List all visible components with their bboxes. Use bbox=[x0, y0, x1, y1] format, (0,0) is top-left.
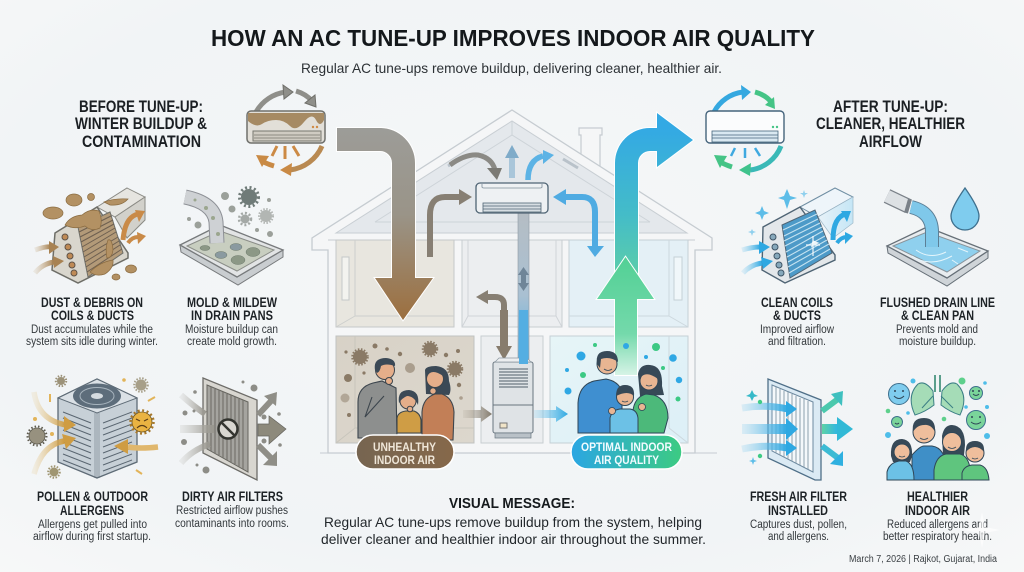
icon: clean AC unit with circulating arrows bbox=[706, 85, 784, 176]
label text: HEALTHIER bbox=[907, 489, 968, 504]
label text: FRESH AIR FILTER bbox=[750, 489, 847, 504]
label text: Captures dust, pollen, bbox=[750, 519, 847, 531]
label text: better respiratory health. bbox=[883, 531, 992, 543]
lower left room bbox=[336, 336, 474, 443]
label text: Allergens get pulled into bbox=[38, 519, 147, 531]
icon: lungs, smileys and family bbox=[885, 375, 990, 480]
panel: clean coils and ducts bbox=[742, 188, 853, 348]
label: unhealthy indoor air: UNHEALTHY bbox=[373, 442, 436, 454]
icon: dirty coil bbox=[35, 188, 146, 283]
date and location: March 7, 2026 | Rajkot, Gujarat, India bbox=[849, 554, 997, 565]
label text: Moisture buildup can bbox=[185, 324, 278, 336]
label text: ALLERGENS bbox=[60, 503, 124, 518]
label text: DUST & DEBRIS ON bbox=[41, 295, 143, 310]
label text: DIRTY AIR FILTERS bbox=[182, 489, 283, 504]
subtitle: Regular AC tune-ups remove buildup, delivering cleaner, healthier air. bbox=[301, 60, 722, 76]
title: HOW AN AC TUNE-UP IMPROVES INDOOR AIR QUALITY bbox=[211, 25, 815, 51]
icon: dirty AC unit with circulating arrows bbox=[247, 85, 325, 176]
label text bbox=[880, 295, 995, 348]
upper centre room bbox=[462, 240, 562, 327]
panel: flushed drain line and clean pan bbox=[880, 188, 995, 348]
house outline bbox=[312, 110, 712, 453]
panel: healthier indoor air bbox=[883, 375, 992, 543]
panel: dust and debris on coils and ducts bbox=[26, 188, 158, 348]
furnace unit with arrows bbox=[463, 310, 568, 438]
label: optimal indoor air quality: AIR QUALITY bbox=[594, 455, 659, 467]
woman coughing bbox=[425, 366, 450, 395]
label text: INDOOR AIR bbox=[905, 503, 970, 518]
arrow: main clean air up bbox=[615, 113, 693, 285]
label text bbox=[760, 295, 835, 348]
label text: & DUCTS bbox=[773, 308, 821, 323]
label: optimal indoor air quality bbox=[571, 435, 682, 469]
central AC and duct bbox=[476, 183, 548, 363]
father bbox=[912, 446, 946, 480]
panel: before heading bbox=[75, 98, 207, 151]
label text: contaminants into rooms. bbox=[175, 518, 289, 530]
panel: dirty air filters bbox=[175, 378, 289, 530]
decorative sparkle bbox=[964, 512, 1000, 548]
visual message: Regular AC tune-ups remove buildup from the system, helping bbox=[324, 514, 702, 530]
mother bbox=[638, 365, 664, 396]
label: unhealthy indoor air: INDOOR AIR bbox=[374, 455, 436, 467]
healthy family and clean particles bbox=[564, 343, 682, 433]
house diagram bbox=[312, 110, 717, 453]
label text: Improved airflow bbox=[760, 324, 835, 336]
child bbox=[610, 409, 638, 433]
chimney bbox=[579, 128, 602, 180]
label text bbox=[750, 489, 847, 543]
panel: before heading: CONTAMINATION bbox=[82, 133, 201, 151]
panel: before heading: BEFORE TUNE-UP: bbox=[79, 98, 203, 116]
label text: moisture buildup. bbox=[899, 336, 976, 348]
label text: Restricted airflow pushes bbox=[176, 505, 288, 517]
panel: pollen and outdoor allergens bbox=[28, 376, 158, 543]
arrow: green rising clean air bbox=[597, 257, 654, 375]
lower centre room bbox=[481, 336, 543, 443]
label text: CLEAN COILS bbox=[761, 295, 833, 310]
label: optimal indoor air quality: OPTIMAL INDOOR bbox=[581, 442, 673, 454]
panel: fresh air filter installed bbox=[742, 379, 853, 543]
label text bbox=[185, 295, 278, 348]
panel: after heading bbox=[816, 98, 965, 151]
label text: & CLEAN PAN bbox=[901, 308, 974, 323]
label text bbox=[26, 295, 158, 348]
label text bbox=[175, 489, 289, 530]
label text: IN DRAIN PANS bbox=[191, 308, 273, 323]
icon: clogged filter bbox=[180, 378, 286, 480]
arrow: main dirty air down bbox=[337, 128, 433, 320]
label text: POLLEN & OUTDOOR bbox=[37, 489, 148, 504]
mother bbox=[942, 425, 965, 455]
panel: after heading: AFTER TUNE-UP: bbox=[833, 98, 948, 116]
label text: airflow during first startup. bbox=[33, 531, 151, 543]
label text bbox=[33, 489, 151, 543]
icon: moldy drain pan bbox=[180, 188, 283, 285]
visual message: VISUAL MESSAGE: bbox=[449, 495, 575, 512]
upper left room bbox=[336, 240, 454, 327]
label text: Prevents mold and bbox=[896, 324, 978, 336]
label text: create mold growth. bbox=[187, 336, 277, 348]
label text bbox=[883, 489, 992, 543]
label text: Reduced allergens and bbox=[887, 519, 988, 531]
unhealthy family and dust bbox=[340, 342, 463, 440]
label text: Dust accumulates while the bbox=[31, 324, 153, 336]
icon: clean drain pan and water drop bbox=[887, 188, 988, 286]
label text: and allergens. bbox=[768, 531, 829, 543]
icon: fresh filter bbox=[742, 379, 853, 480]
small attic arrows bbox=[430, 145, 604, 345]
label text: COILS & DUCTS bbox=[51, 308, 134, 323]
label text: INSTALLED bbox=[768, 503, 828, 518]
visual message bbox=[321, 495, 706, 547]
panel: after heading: CLEANER, HEALTHIER bbox=[816, 115, 965, 133]
child coughing bbox=[397, 411, 421, 433]
panel: before heading: WINTER BUILDUP & bbox=[75, 115, 207, 133]
son bbox=[962, 465, 989, 480]
upper right room bbox=[569, 240, 688, 327]
label text: and filtration. bbox=[768, 336, 826, 348]
visual message: deliver cleaner and healthier indoor air throughout the summer. bbox=[321, 531, 706, 547]
daughter bbox=[891, 439, 912, 462]
label: unhealthy indoor air bbox=[356, 435, 454, 469]
label text: FLUSHED DRAIN LINE bbox=[880, 295, 995, 310]
label text: MOLD & MILDEW bbox=[187, 295, 277, 310]
attic bbox=[336, 121, 687, 233]
man coughing bbox=[358, 381, 397, 438]
panel: mold and mildew in drain pans bbox=[180, 188, 283, 348]
icon: outdoor unit with allergens bbox=[28, 376, 158, 478]
label text: system sits idle during winter. bbox=[26, 336, 158, 348]
icon: clean coil bbox=[742, 188, 853, 283]
father bbox=[578, 379, 622, 433]
lower right room bbox=[550, 336, 688, 443]
panel: after heading: AIRFLOW bbox=[859, 133, 922, 151]
